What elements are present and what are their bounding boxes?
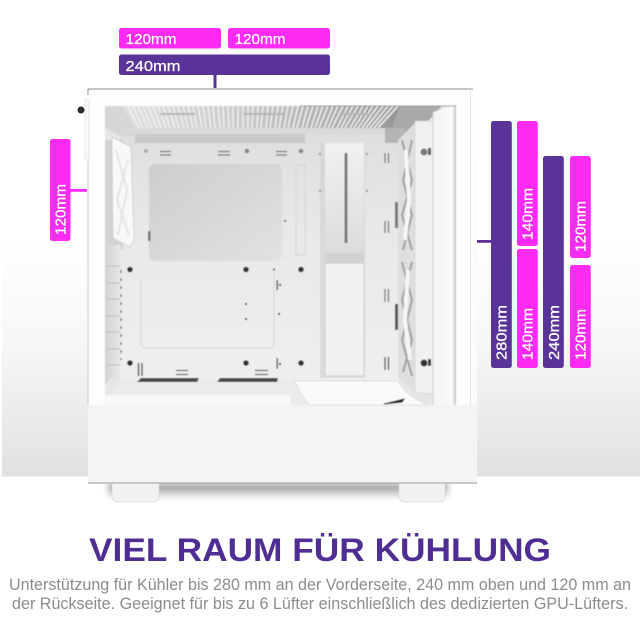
label: top 240mm <box>119 54 330 75</box>
tie-down slots <box>160 152 398 370</box>
label: top 120mm left <box>119 28 221 48</box>
label: front 120mm upper: 120mm <box>572 201 590 252</box>
front fan size labels <box>477 121 591 368</box>
motherboard tray outline <box>141 165 305 348</box>
label: front 140mm upper: 140mm <box>520 188 536 240</box>
title: VIEL RAUM FÜR KÜHLUNG <box>89 532 551 568</box>
label: top 120mm right <box>228 28 330 48</box>
rear fan size label: 120mm <box>52 184 70 235</box>
front post <box>300 106 456 405</box>
shelf band under ceiling <box>120 128 405 143</box>
connector: front <box>477 240 491 243</box>
label: front 280mm <box>491 121 512 368</box>
label: front 120mm lower: 120mm <box>572 309 590 360</box>
motherboard window cutout <box>149 164 282 261</box>
shadow under case <box>108 484 448 499</box>
connector: top <box>214 75 216 88</box>
case interior <box>105 106 456 405</box>
rear fan <box>105 137 134 250</box>
ceiling mesh <box>105 106 442 143</box>
label: top 240mm: 240mm <box>126 58 180 75</box>
front radiator column <box>415 121 433 394</box>
description text: Unterstützung für Kühler bis 280 mm an der Vorderseite, 240 mm oben und 120 mm an <box>9 576 631 594</box>
PCI slots <box>105 245 121 384</box>
rear fan size label <box>50 139 87 241</box>
label: front 120mm lower <box>570 265 591 368</box>
background panel <box>2 0 640 476</box>
floor shelf <box>105 363 405 405</box>
glass handle and latch <box>78 100 89 160</box>
case body frame <box>88 89 477 410</box>
front lower panel <box>88 405 477 483</box>
GPU bracket <box>320 143 365 378</box>
bottom fan <box>295 381 428 405</box>
label: front 280mm: 280mm <box>494 305 510 360</box>
description text <box>9 576 631 613</box>
label: top 120mm right: 120mm <box>234 31 286 48</box>
label: front 120mm upper <box>570 156 591 258</box>
label: front 240mm: 240mm <box>546 305 563 360</box>
description text: der Rückseite. Geeignet für bis zu 6 Lüfter einschließlich des dedizierten GPU-Lüfters. <box>12 595 628 613</box>
front fans <box>398 122 416 392</box>
label: front 240mm <box>543 156 564 368</box>
case feet <box>112 480 445 502</box>
label: front 140mm lower: 140mm <box>520 308 536 360</box>
mounting screws and holes <box>127 149 368 369</box>
label: top 120mm left: 120mm <box>126 31 176 48</box>
back panel <box>120 128 400 380</box>
PC case <box>78 89 477 502</box>
top fan size labels <box>119 28 330 88</box>
label: front 140mm lower <box>517 249 538 368</box>
label: front 140mm upper <box>517 121 538 246</box>
